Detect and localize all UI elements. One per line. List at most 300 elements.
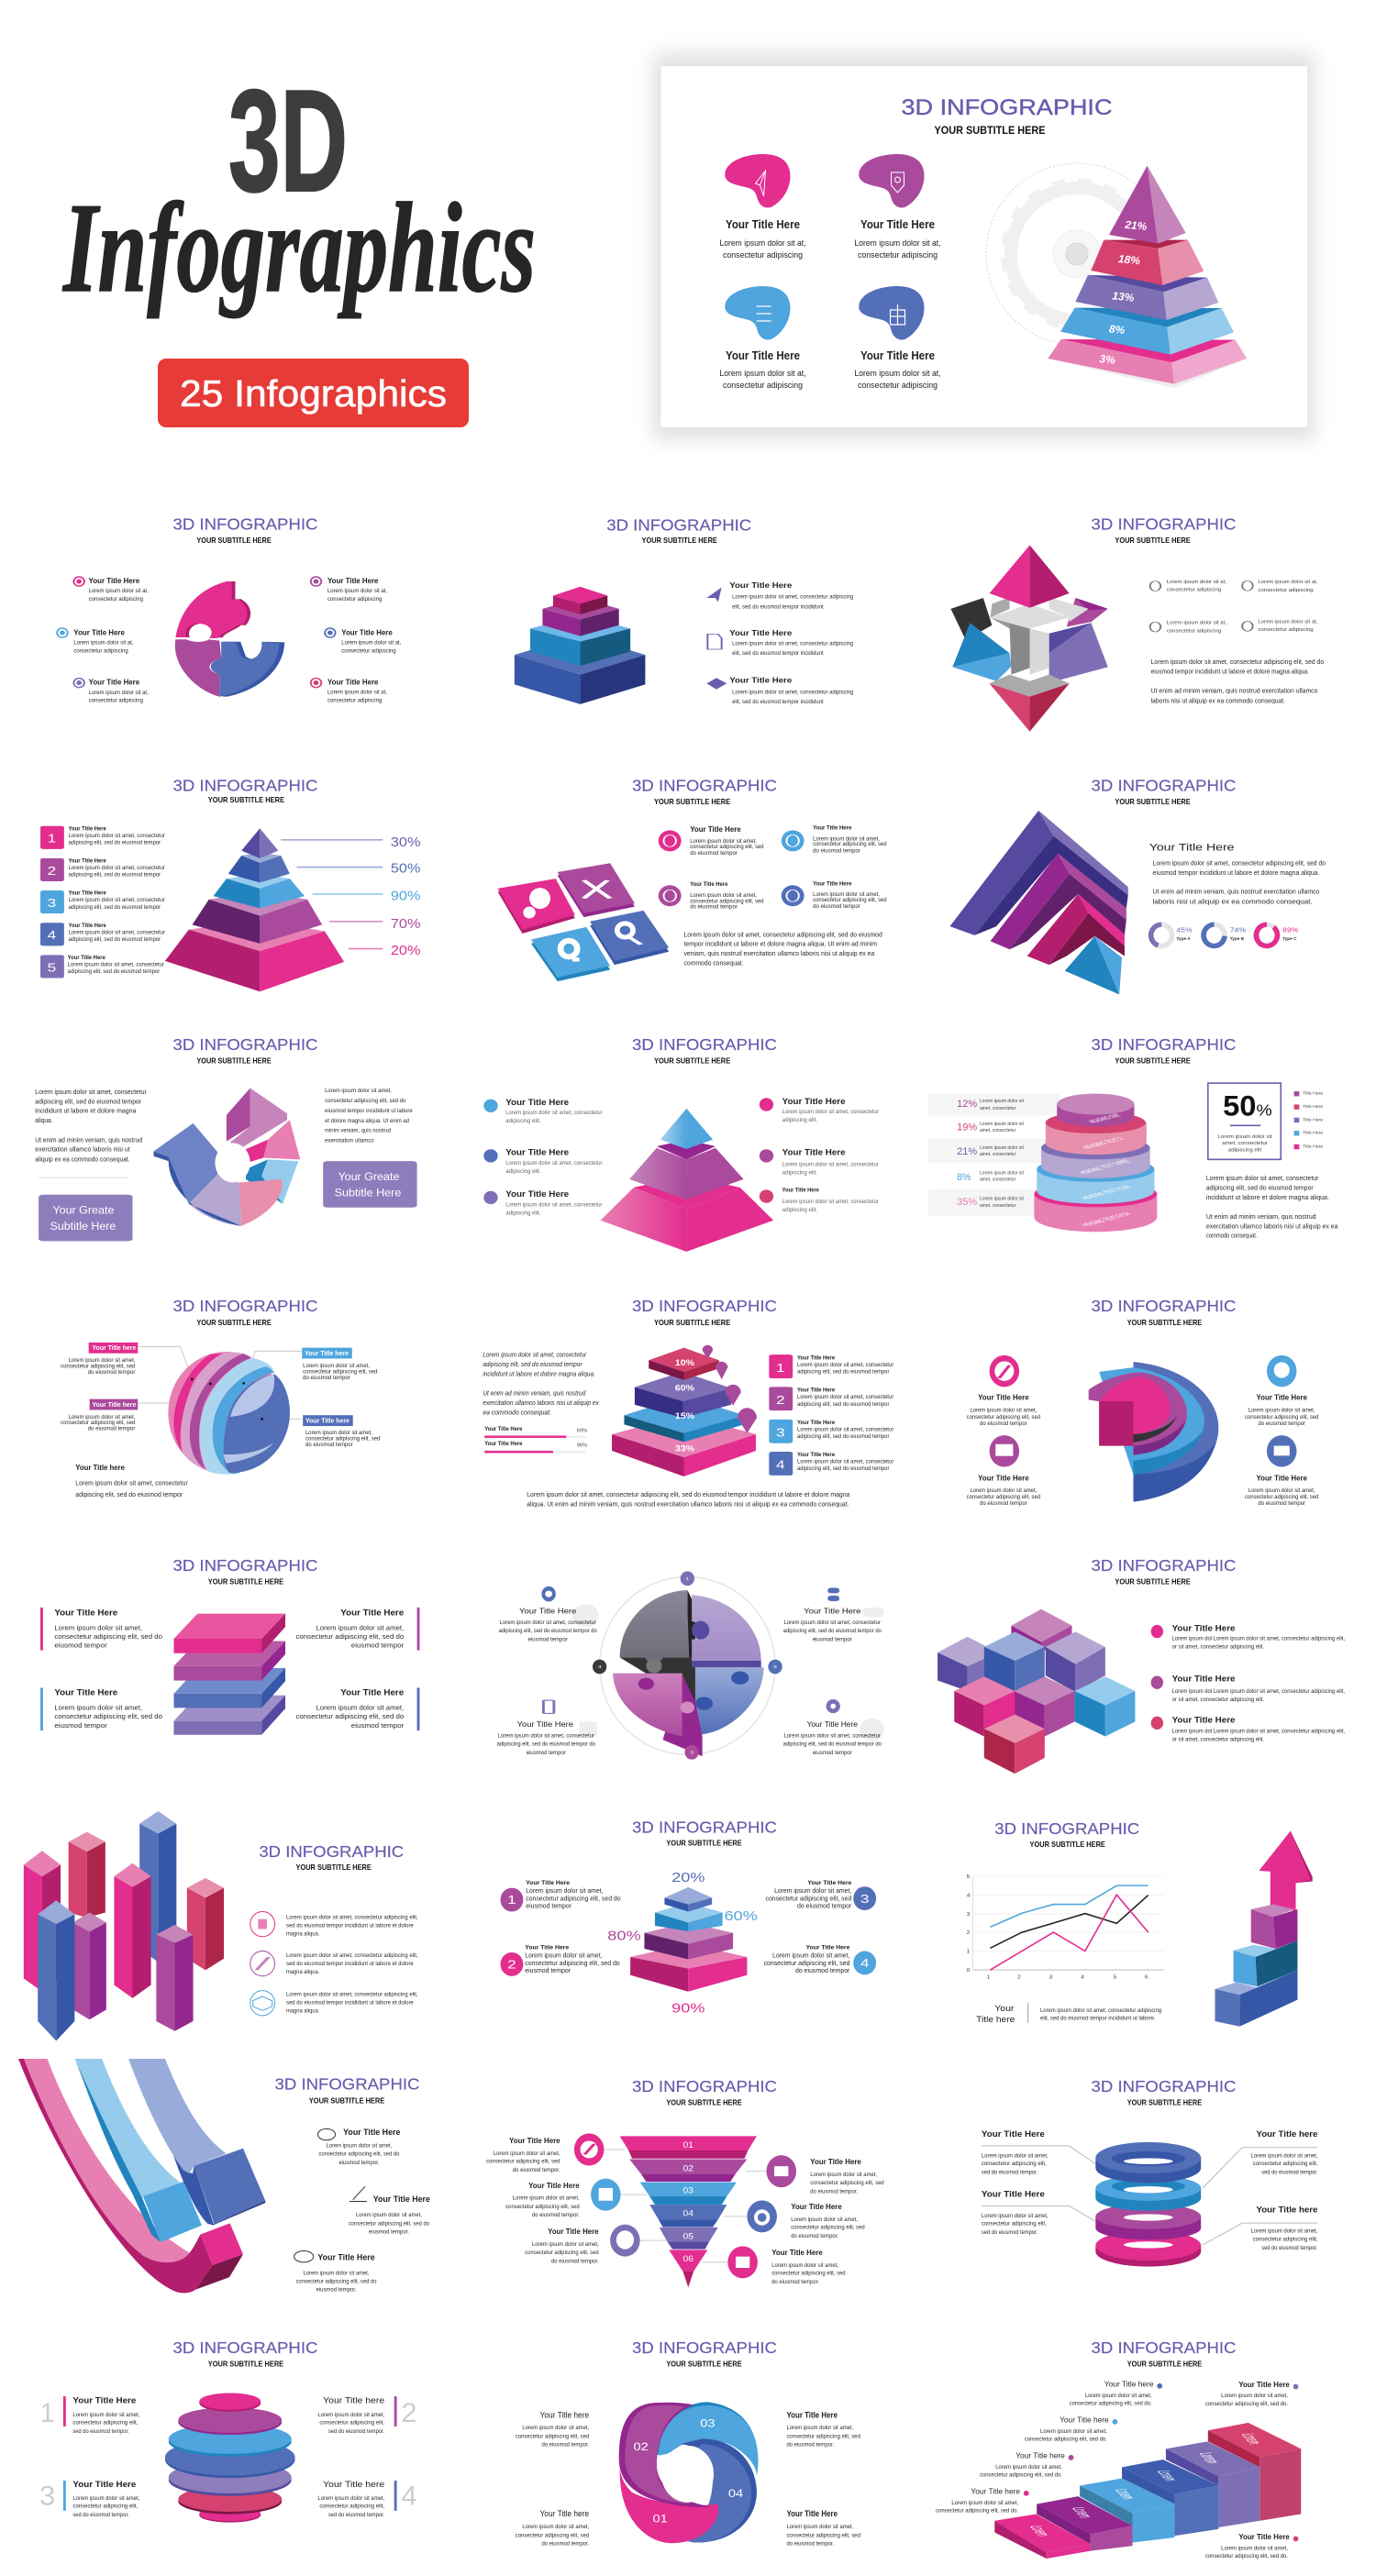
rows 1 and 2 of slides: Lorem ipsum dolor sit at,	[341, 639, 401, 646]
panel: star diamond	[950, 514, 1324, 732]
layers graphic	[173, 1614, 285, 1735]
item 4	[980, 2452, 1073, 2478]
panel: cylinder stack: HEADING TEXT FOUR	[1080, 1185, 1134, 1200]
panel: funnel: consectetur adipiscing elit, sed	[771, 2270, 846, 2276]
panel: stacked rings: YOUR SUBTITLE HERE	[1127, 2099, 1202, 2106]
panel: stacked rings	[982, 2077, 1317, 2267]
item: bottom left	[516, 2509, 589, 2547]
item 3: eiusmod tempor.	[316, 2286, 357, 2293]
text block 3: Lorem ipsum dolor sit at,	[719, 369, 805, 379]
left item 3	[483, 1189, 603, 1216]
panel: funnel	[486, 2077, 884, 2287]
panel: puzzle circle: 3D INFOGRAPHIC	[173, 514, 317, 533]
small text blocks: Lorem ipsum dolor sit at,	[1167, 621, 1226, 625]
heading: 3D: 3D	[228, 61, 348, 222]
item: clipboard: Your Title Here	[517, 1719, 573, 1729]
panel: circular arrow	[35, 1035, 417, 1241]
panel: cylinder stack: amet, consectetur	[980, 1106, 1016, 1111]
small text blocks	[1167, 580, 1317, 634]
panel: stacked rings: Your Title Here	[982, 2129, 1045, 2139]
text 2	[729, 628, 853, 657]
right item 3: Your Title Here	[782, 1187, 819, 1193]
rows 1 and 2 of slides: Lorem ipsum dolor sit amet, consectetur adipiscing	[732, 593, 853, 600]
item 1: do eiusmod tempor	[690, 849, 738, 856]
panel: interlocked loop: YOUR SUBTITLE HERE	[666, 2360, 742, 2369]
rows 7 and 8 of slides: consectetur adipiscing elit, sed do	[349, 2219, 429, 2227]
panel: staircase: Your Title here	[1015, 2452, 1065, 2460]
percentages: 90%	[671, 2000, 705, 2016]
rows 1 and 2 of slides: veniam, quis nostrud exercitation ullamco laboris nisi ut aliquip ex ea	[684, 950, 875, 957]
panel: curved ribbons text: Your Title Here	[343, 2128, 401, 2137]
item 6: Your Title Here	[771, 2250, 823, 2257]
rows 5 and 6 of slides: adipiscing elit, sed do eiusmod tempor do	[783, 1741, 882, 1747]
item 3: Your Title Here	[797, 1419, 835, 1425]
item: top right: eiusmod tempor	[351, 1642, 404, 1650]
item 2	[505, 2179, 621, 2218]
item 4: 4	[776, 1458, 785, 1472]
panel: cylinder stack: YOUR SUBTITLE HERE	[1115, 1057, 1191, 1066]
panel: line chart and arrow: elit, sed do eiusmod tempor incididunt ut labore.	[1040, 2015, 1155, 2021]
rows 7 and 8 of slides: Lorem ipsum dolor sit amet,	[356, 2211, 422, 2218]
funnel graphic: 01	[683, 2140, 694, 2150]
panel: stacked cubes: 3D INFOGRAPHIC	[606, 516, 751, 534]
panel: puzzle quadrants: adipiscing elit, sed do eiusmod tempor do	[499, 1627, 597, 1634]
line chart	[967, 1874, 1164, 1980]
icon blob: sliders	[725, 286, 791, 340]
panel: curved ribbons text: Your Title Here	[317, 2253, 375, 2262]
item 4: do eiusmod tempor	[795, 1967, 849, 1974]
stairs graphic: Lorem	[1111, 2488, 1137, 2501]
stat: 8%	[957, 1171, 1024, 1182]
item: top left: Your Title Here	[54, 1608, 117, 1617]
item: top right	[786, 2410, 860, 2448]
badge: 25 Infographics	[158, 359, 469, 427]
panel: floating layers: Lorem ipsum dolor sit amet,	[54, 1624, 142, 1631]
item 2: do eiusmod tempor.	[532, 2211, 580, 2218]
rows 7 and 8 of slides	[39, 2075, 1317, 2559]
panel: circular arrow: incididunt ut labore et dolore magna	[35, 1108, 137, 1115]
panel: stacked discs: Your Title Here	[72, 2479, 136, 2489]
panel: nested chevrons: Your Title Here	[1149, 841, 1235, 853]
item: top left	[516, 2410, 589, 2448]
panel: puzzle quadrants	[497, 1571, 884, 1760]
left item 3: Your Title Here	[505, 1189, 569, 1199]
rows 1 and 2 of slides: consectetur adipiscing	[327, 595, 382, 602]
funnel graphic: 02	[683, 2163, 694, 2172]
item 4: 4	[860, 1956, 869, 1970]
item 2	[317, 2395, 417, 2435]
item 1	[500, 1879, 621, 1911]
rows 5 and 6 of slides: consectetur adipiscing elit, sed	[766, 1896, 851, 1903]
text block 2	[855, 217, 941, 260]
cube cluster	[938, 1609, 1135, 1774]
right item 1: Your Title Here	[782, 1097, 846, 1106]
text 3: Your Title Here	[729, 676, 792, 685]
panel: cylinder stack: Title Here	[1303, 1144, 1323, 1148]
panel: stacked rings: Lorem ipsum dolor sit amet,	[982, 2212, 1049, 2218]
tag 2	[61, 1399, 138, 1432]
sphere graphic	[138, 1346, 301, 1475]
item 4: do eiusmod tempor.	[810, 2187, 858, 2195]
rows 7 and 8 of slides: Lorem ipsum dolor sit amet,	[786, 2424, 853, 2431]
rows 3 and 4 of slides: consectetur adipiscing elit, sed do	[325, 1097, 405, 1104]
item 1	[1151, 1623, 1345, 1650]
rows 5 and 6 of slides: Lorem ipsum dolor sit amet, consectetur adipiscing elit,	[286, 1913, 418, 1920]
panel: layered sphere text: do eiusmod tempor	[88, 1425, 136, 1432]
panel: layered sphere text: Lorem ipsum dolor sit amet, consectetur	[75, 1480, 188, 1487]
puzzle graphic	[175, 581, 284, 697]
item 1: 1	[776, 1361, 785, 1375]
small text blocks: consectetur adipiscing	[1167, 628, 1221, 634]
paragraph	[684, 931, 882, 967]
panel: curved ribbons text	[275, 2075, 430, 2293]
item 4	[766, 2155, 884, 2195]
stepped graphic: 15%	[675, 1411, 694, 1421]
rows 3 and 4 of slides: Lorem ipsum dolor sit amet, consectetur	[782, 1161, 879, 1167]
rows 7 and 8 of slides: Your Title Here	[786, 2509, 838, 2518]
item 4: sed do eiusmod tempor.	[328, 2511, 384, 2518]
panel: puzzle circle: Your Title Here	[327, 577, 379, 585]
small icons	[1150, 580, 1253, 632]
panel: cylinder stack: amet, consectetur	[980, 1177, 1016, 1182]
panel: staircase: Your Title here	[1104, 2381, 1154, 2389]
panel: diamond steps: exercitation ullamco laboris nisi ut aliquip ex	[483, 1399, 599, 1407]
small text blocks: consectetur adipiscing	[1258, 627, 1314, 633]
item: left 3	[72, 678, 149, 703]
item 3: Your Title Here	[69, 890, 106, 896]
item 3: Lorem ipsum dolor sit amet,	[532, 2240, 599, 2247]
donut: type B	[1201, 922, 1246, 948]
item 2: 2	[507, 1958, 516, 1972]
stat: 21%: 21%	[957, 1145, 977, 1156]
panel: curved ribbons text: YOUR SUBTITLE HERE	[309, 2097, 384, 2106]
item 1	[769, 1354, 894, 1378]
puzzle graphic	[613, 1590, 764, 1756]
small text blocks: consectetur adipiscing	[1258, 588, 1314, 592]
panel: stacked rings: consectetur adipiscing elit,	[982, 2160, 1047, 2167]
panel: puzzle circle: Your Title Here	[327, 679, 379, 686]
item 4: Lorem ipsum dolor sit amet,	[317, 2494, 384, 2501]
item 1	[967, 1355, 1040, 1426]
3D star graphic	[950, 546, 1108, 732]
item: bottom right	[296, 1687, 419, 1730]
panel: cylinder stack: amet, consectetur	[980, 1152, 1016, 1157]
item 1: consectetur adipiscing elit, sed	[486, 2157, 560, 2164]
panel: staircase: Lorem ipsum dolor sit amet,	[951, 2499, 1018, 2505]
paragraph: commodo consequat.	[684, 960, 744, 967]
paragraph	[1151, 658, 1324, 704]
item 6: do eiusmod tempor.	[771, 2278, 819, 2285]
panel: icon tiles: consectetur adipiscing elit, sed	[690, 897, 764, 904]
rows 7 and 8 of slides: consectetur adipiscing elit, sed	[786, 2531, 860, 2538]
stat: 12%: 12%	[957, 1097, 977, 1109]
text block 4: consectetur adipiscing	[858, 381, 938, 391]
chevron graphic	[949, 811, 1128, 994]
panel: numbered pyramid: adipiscing elit, sed do eiusmod tempor	[69, 935, 161, 942]
item 1	[40, 2395, 139, 2435]
item: bottom right	[786, 2509, 860, 2547]
panel: floating layers: YOUR SUBTITLE HERE	[208, 1578, 283, 1586]
panel: circular arrow: Ut enim ad minim veniam, quis nostrud	[35, 1136, 142, 1144]
text block 4	[855, 348, 941, 391]
rows 1 and 2 of slides: consectetur adipiscing elit, sed	[813, 840, 887, 847]
panel: nested chevrons	[949, 776, 1326, 994]
rows 1 and 2 of slides: elit, sed do eiusmod tempor incididunt	[732, 698, 824, 705]
panel: nested half circles: Lorem ipsum dolor sit amet,	[970, 1407, 1037, 1413]
item 3: 3	[776, 1426, 785, 1440]
panel: staircase	[936, 2338, 1301, 2559]
item: star: eiusmod tempor	[528, 1636, 568, 1642]
panel: numbered pyramid	[40, 776, 420, 991]
item: bottom left: eiusmod tempor	[54, 1722, 107, 1730]
text block 3	[719, 348, 805, 391]
rows 1 and 2 of slides: 50%	[391, 861, 420, 876]
rings graphic	[1095, 2142, 1201, 2267]
button: right	[323, 1161, 417, 1208]
item 1	[1070, 2381, 1162, 2406]
item 4: Your Title Here	[806, 1943, 849, 1951]
right item 3	[760, 1187, 879, 1213]
panel: diamond steps: incididunt ut labore et dolore magna aliqua.	[483, 1371, 595, 1377]
rows 1 and 2 of slides	[40, 514, 1326, 994]
panel: numbered pyramid: adipiscing elit, sed do eiusmod tempor	[68, 967, 160, 975]
panel: layered sphere text: adipiscing elit, sed do eiusmod tempor	[75, 1491, 183, 1498]
line chart: 5	[967, 1874, 971, 1879]
panel: stacked discs	[39, 2338, 417, 2523]
text block 4: Lorem ipsum dolor sit at,	[855, 369, 941, 379]
item 3	[1025, 2416, 1117, 2442]
panel: puzzle circle: YOUR SUBTITLE HERE	[196, 537, 272, 545]
item: bottom right: do eiusmod tempor.	[786, 2539, 834, 2547]
item: left 2	[56, 627, 133, 654]
funnel graphic: 06	[683, 2254, 694, 2263]
panel: numbered pyramid: Lorem ipsum dolor sit amet, consectetur	[68, 961, 164, 967]
pyramid chart: 21%	[1124, 218, 1148, 233]
panel: numbered pyramid: Lorem ipsum dolor sit amet, consectetur	[69, 832, 165, 838]
rows 5 and 6 of slides: consectetur adipiscing elit, sed do	[296, 1713, 404, 1720]
small text blocks: consectetur adipiscing	[1167, 587, 1221, 592]
50% box: Lorem ipsum dolor sit	[1217, 1134, 1272, 1139]
rows 7 and 8 of slides: Your Title Here	[1238, 2381, 1290, 2389]
item 3: consectetur adipiscing elit, sed	[525, 2249, 599, 2256]
cylinder labels: HEADING ONE	[1087, 1113, 1124, 1124]
rows 3 and 4 of slides: minim veniam, quis nostrud	[325, 1127, 391, 1133]
panel: isometric cubes	[938, 1556, 1345, 1774]
text block 1: Lorem ipsum dolor sit at,	[719, 238, 805, 249]
panel: circular arrow: exercitation ullamco laboris nisi ut	[35, 1146, 130, 1154]
rows 1 and 2 of slides: Lorem ipsum dolor sit at,	[327, 587, 387, 593]
item 1: eiusmod tempor.	[338, 2159, 379, 2165]
item 2: magna aliqua.	[286, 1968, 319, 1974]
panel: staircase: consectetur adipiscing elit, sed do.	[1025, 2436, 1107, 2442]
item 2	[500, 1943, 620, 1976]
icon: graduation cap	[706, 678, 727, 690]
panel: interlocked loop: Lorem ipsum dolor sit amet,	[522, 2523, 589, 2530]
item 2: Your Title Here	[525, 1943, 569, 1951]
panel: pyramid with side points	[483, 1035, 879, 1252]
discs graphic	[165, 2393, 295, 2523]
panel: line chart and arrow: YOUR SUBTITLE HERE	[1030, 1841, 1105, 1849]
item 2	[1151, 1674, 1345, 1702]
panel: icon tiles: YOUR SUBTITLE HERE	[654, 799, 730, 806]
rows 1 and 2 of slides: 30%	[391, 835, 420, 849]
panel: staircase: Lorem ipsum dolor sit amet,	[1085, 2392, 1152, 2398]
rows 5 and 6 of slides	[24, 1556, 1345, 2041]
progress bars: Your Title Here	[484, 1441, 522, 1447]
panel: interlocked loop: do eiusmod tempor.	[541, 2440, 589, 2448]
right item 3: adipiscing elit.	[782, 1206, 817, 1213]
panel: nested chevrons: 45%	[1176, 927, 1193, 934]
rows 7 and 8 of slides: Your Title Here	[786, 2410, 838, 2419]
item 3	[1245, 1355, 1318, 1426]
item: clipboard: eiusmod tempor	[527, 1749, 566, 1755]
panel: stacked rings: consectetur adipiscing elit,	[982, 2220, 1047, 2227]
item: toggles: eiusmod tempor	[813, 1636, 852, 1642]
loop graphic: 01	[653, 2513, 668, 2526]
rows 7 and 8 of slides: 4	[401, 2482, 417, 2511]
panel: star diamond: YOUR SUBTITLE HERE	[1115, 537, 1191, 545]
rows 7 and 8 of slides: 2	[401, 2398, 417, 2428]
item: clipboard	[497, 1700, 595, 1755]
rows 5 and 6 of slides: sed do eiusmod tempor incididunt ut labore et dolore	[286, 1921, 414, 1929]
item 2	[40, 857, 165, 881]
item 3	[525, 2225, 640, 2264]
item 1: Your Title Here	[1172, 1623, 1235, 1632]
line chart: 2	[967, 1930, 971, 1935]
panel: layered sphere text: Your Title here	[92, 1401, 136, 1409]
rows 5 and 6 of slides: consectetur adipiscing elit, sed do	[296, 1633, 404, 1641]
panel: icon tiles: Lorem ipsum dolor sit amet,	[690, 837, 757, 844]
legend	[1294, 1091, 1323, 1149]
right item 1	[760, 1097, 879, 1123]
line chart: 4	[967, 1893, 971, 1898]
badge: 25 Infographics: 25 Infographics	[180, 372, 447, 415]
rows 3 and 4 of slides: consectetur adipiscing elit, sed	[305, 1435, 380, 1442]
rows 5 and 6 of slides: Lorem ipsum dolor sit amet,	[772, 1951, 849, 1959]
rows 1 and 2 of slides: elit, sed do eiusmod tempor incididunt	[732, 649, 824, 657]
panel: funnel: YOUR SUBTITLE HERE	[666, 2099, 742, 2106]
item 5: Your Title Here	[791, 2203, 842, 2211]
rows 3 and 4 of slides: adipiscing elit, sed do eiusmod tempor	[797, 1400, 890, 1407]
item 1: eiusmod tempor	[526, 1903, 571, 1910]
cylinder labels: HEADING TEXT 2	[1081, 1136, 1126, 1150]
line chart: 1	[987, 1974, 991, 1980]
panel: stacked discs: consectetur adipiscing elit,	[72, 2502, 138, 2509]
rows 5 and 6 of slides: Lorem ipsum dolor sit amet, consectetur adipiscing elit,	[286, 1951, 418, 1958]
tag 1	[61, 1343, 138, 1375]
rows 7 and 8 of slides: consectetur adipiscing elit, sed do	[318, 2150, 399, 2157]
panel: puzzle quadrants: Lorem ipsum dolor sit amet, consectetur	[498, 1732, 594, 1739]
rows 7 and 8 of slides: consectetur adipiscing elit, sed	[791, 2224, 865, 2230]
node 4: 4	[598, 1664, 602, 1669]
item 3	[769, 1419, 894, 1443]
panel: staircase: Lorem ipsum dolor sit amet,	[995, 2463, 1062, 2470]
panel: circular arrow: Your Greate	[52, 1204, 114, 1217]
node 1	[681, 1571, 694, 1586]
item 1: Your Title Here	[526, 1879, 570, 1886]
bottom paragraph	[527, 1491, 850, 1509]
panel: nested chevrons: Type A	[1176, 936, 1191, 941]
left item 1: adipiscing elit.	[505, 1117, 541, 1124]
line chart: 2	[1017, 1974, 1021, 1980]
right item 1: adipiscing elit.	[782, 1116, 817, 1123]
rows 3 and 4 of slides: Lorem ipsum dolor sit amet, consectetur	[797, 1458, 894, 1465]
rows 3 and 4 of slides: adipiscing elit, sed do eiusmod tempor	[797, 1432, 890, 1439]
item 3: do eiusmod tempor.	[551, 2258, 599, 2264]
panel: interlocked loop: Your Title here	[540, 2410, 589, 2419]
panel: layered sphere text: do eiusmod tempor	[88, 1368, 136, 1375]
panel: puzzle circle: Your Title Here	[73, 629, 125, 637]
right paragraph	[325, 1087, 413, 1144]
rows 5 and 6 of slides: Lorem ipsum dolor sit amet,	[316, 1624, 404, 1631]
cylinders graphic	[1034, 1094, 1157, 1232]
donut: type C	[1254, 922, 1298, 948]
line chart: 0	[967, 1968, 971, 1973]
item 2	[782, 824, 887, 854]
percentage callouts	[281, 835, 420, 958]
panel: staircase: Your Title here	[971, 2488, 1020, 2496]
panel: layered sphere text: consectetur adipiscing elit, sed	[61, 1363, 135, 1369]
item 4: Your Title Here	[810, 2158, 861, 2166]
rows 3 and 4 of slides: Lorem ipsum dolor sit amet, consectetur	[797, 1393, 894, 1400]
panel: staircase: Your Title here	[1060, 2416, 1109, 2425]
panel: cylinder stack: amet, consectetur	[980, 1128, 1016, 1133]
panel: stepped cube tower: 60%	[725, 1908, 758, 1923]
panel: numbered pyramid: Lorem ipsum dolor sit amet, consectetur	[69, 896, 165, 903]
item 3	[659, 881, 764, 910]
panel: line chart and arrow	[967, 1819, 1313, 2027]
panel: nested chevrons: Type B	[1230, 936, 1244, 941]
connector lines	[604, 2150, 766, 2262]
rows 5 and 6 of slides: sed do eiusmod tempor incididunt ut labore et dolore	[286, 1999, 414, 2006]
item: bottom left: Your Title Here	[54, 1687, 117, 1697]
rows 7 and 8 of slides: 3D INFOGRAPHIC	[275, 2075, 419, 2094]
text 3	[729, 676, 853, 705]
rows 1 and 2 of slides: elit, sed do eiusmod tempor incididunt	[732, 603, 824, 610]
pyramid chart: 18%	[1117, 252, 1141, 268]
item 1: Your Title Here	[690, 825, 741, 834]
rows 1 and 2 of slides: Your Title Here	[341, 629, 393, 637]
item: bottom left	[40, 1687, 162, 1730]
item 1: 1	[48, 832, 56, 846]
panel: nested half circles	[967, 1297, 1318, 1507]
panel: layered sphere text: consectetur adipiscing elit, sed	[61, 1419, 135, 1426]
right item 2: adipiscing elit.	[782, 1169, 817, 1176]
rows 1 and 2 of slides: consectetur adipiscing elit, sed	[813, 896, 887, 903]
node 2	[768, 1660, 782, 1674]
rows 1 and 2 of slides: 20%	[391, 944, 420, 958]
item 4: do eiusmod tempor	[813, 902, 860, 910]
rows 7 and 8 of slides: Lorem ipsum dolor sit amet,	[791, 2216, 858, 2222]
item 2: Lorem ipsum dolor sit amet,	[317, 2411, 384, 2417]
icon: document	[707, 634, 722, 649]
panel: stacked discs: Your Title Here	[72, 2395, 136, 2405]
item 4: Your Title Here	[797, 1452, 835, 1458]
panel: cylinder stack: Title Here	[1303, 1131, 1323, 1135]
rows 3 and 4 of slides: Lorem ipsum dolor sit amet,	[325, 1087, 392, 1094]
item 2: Lorem ipsum dolor sit amet,	[513, 2195, 580, 2201]
left paragraph: ea commodo consequat.	[483, 1410, 551, 1416]
rows 3 and 4 of slides: adipiscing elit, sed do eiusmod tempor	[797, 1368, 890, 1375]
item 2: do eiusmod tempor	[813, 846, 860, 854]
item 2: eiusmod tempor	[525, 1967, 571, 1974]
rows 3 and 4 of slides: adipiscing elit, sed do eiusmod tempor	[797, 1465, 890, 1472]
item 4: 4	[48, 928, 56, 942]
panel: stacked discs: 3D INFOGRAPHIC	[173, 2338, 317, 2357]
item: right 3	[310, 678, 387, 703]
slide subtitle: YOUR SUBTITLE HERE	[934, 124, 1046, 137]
panel: floating layers: Lorem ipsum dolor sit amet,	[54, 1705, 142, 1711]
